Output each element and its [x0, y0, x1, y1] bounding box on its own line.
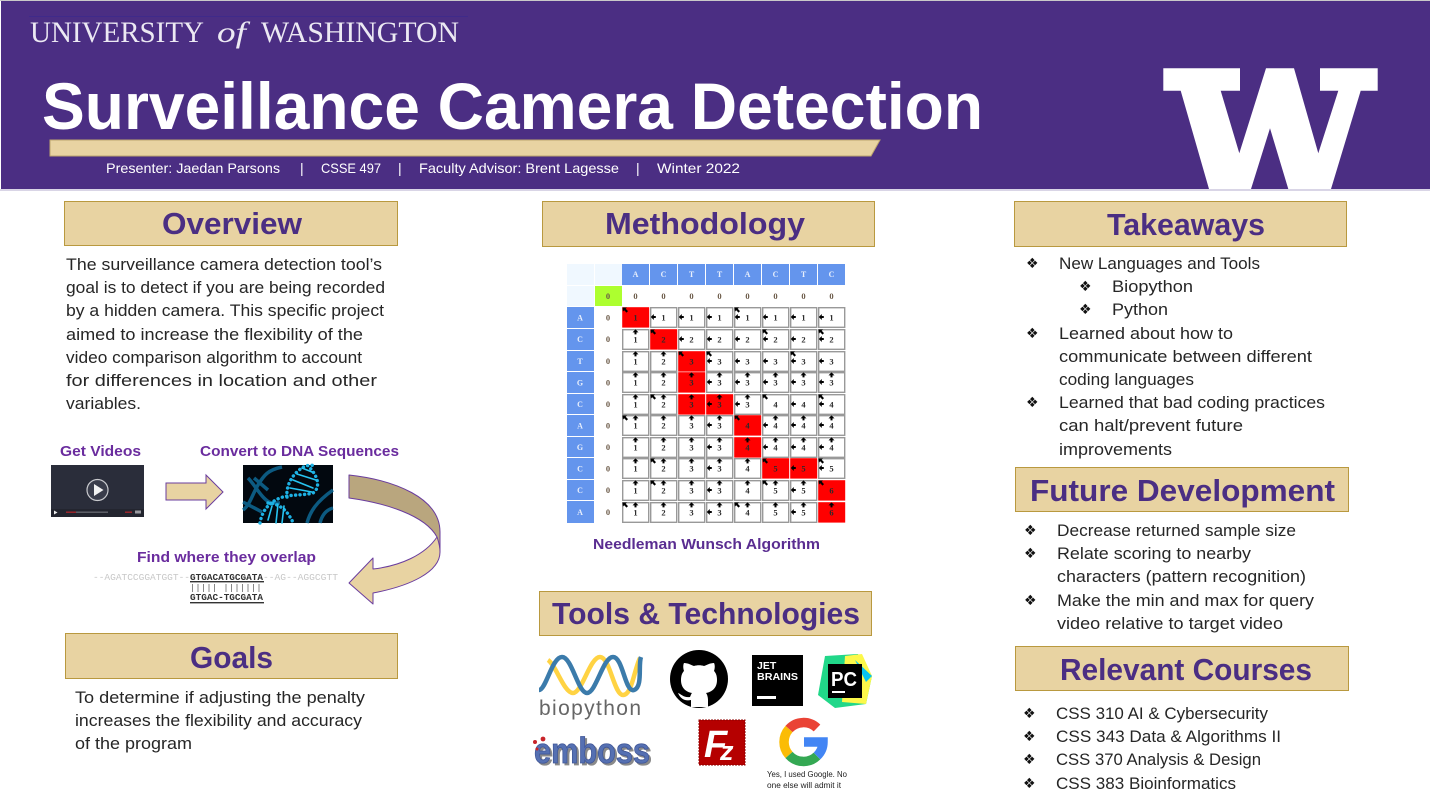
- matrix row 10: 1: [633, 508, 638, 518]
- matrix row 7: 2: [661, 442, 666, 452]
- matrix row 8: 3: [717, 464, 722, 474]
- matrix row 7: 4: [829, 442, 834, 452]
- matrix row 6: 1: [633, 420, 638, 430]
- matrix row 5: 2: [661, 400, 666, 410]
- overview text: The surveillance camera detection tool’s: [66, 255, 382, 274]
- icon: github: [670, 650, 728, 708]
- sequence alignment: GTGACATGCGATA: [190, 573, 264, 583]
- overview text: goal is to detect if you are being recorded: [66, 278, 385, 297]
- matrix row 4: 3: [745, 378, 750, 388]
- matrix header: C: [661, 270, 667, 279]
- matrix zero row and column: 0: [606, 291, 610, 301]
- takeaways heading: [1014, 202, 1346, 246]
- matrix zero row and column: 0: [661, 291, 666, 301]
- matrix row 5: 1: [633, 400, 638, 410]
- matrix row 6: 2: [661, 420, 666, 430]
- takeaways list: Learned about how to: [1059, 324, 1233, 343]
- panel: goals: [66, 634, 398, 753]
- matrix row 1: 1: [661, 312, 666, 322]
- matrix row 1: 1: [717, 312, 722, 322]
- matrix row 4: 3: [689, 378, 694, 388]
- matrix row 7: 4: [801, 442, 806, 452]
- icon: emboss: emboss: [536, 732, 652, 773]
- matrix zero row and column: 0: [606, 334, 610, 344]
- courses list: ❖: [1023, 706, 1036, 722]
- matrix row 7: 4: [745, 442, 750, 452]
- overview heading: Overview: [162, 206, 303, 241]
- matrix zero row and column: 0: [606, 507, 610, 517]
- matrix zero row and column: 0: [606, 442, 610, 452]
- matrix row 2: 2: [801, 334, 806, 344]
- matrix row 4: 1: [633, 378, 638, 388]
- future list: Decrease returned sample size: [1057, 521, 1296, 540]
- matrix row 5: [623, 394, 845, 415]
- process diagram: [51, 444, 440, 604]
- future list: Relate scoring to nearby: [1057, 544, 1252, 563]
- gold title bar: [50, 140, 880, 156]
- matrix row 1: 1: [829, 312, 834, 322]
- panel: future development: [1016, 468, 1348, 633]
- matrix header: [567, 264, 845, 523]
- courses list: ❖: [1023, 729, 1036, 745]
- panel: takeaways: [1014, 202, 1346, 459]
- matrix row 8: 3: [689, 464, 694, 474]
- google caption: [767, 769, 847, 790]
- matrix row 5: 3: [689, 400, 694, 410]
- matrix zero row and column: 0: [745, 291, 750, 301]
- matrix zero row and column: 0: [829, 291, 834, 301]
- panel: methodology: [542, 202, 874, 553]
- university wordmark: of: [217, 16, 251, 49]
- matrix row 6: 3: [689, 420, 694, 430]
- takeaways list: ❖: [1079, 302, 1092, 318]
- methodology heading: Methodology: [605, 206, 806, 241]
- matrix row 8: 4: [745, 464, 750, 474]
- matrix row 2: 2: [829, 334, 834, 344]
- sequence alignment: --AGATCCGGATGGT--: [93, 573, 190, 583]
- matrix row 3: 3: [829, 356, 834, 366]
- goals heading: [66, 634, 398, 678]
- future heading: Future Development: [1030, 473, 1335, 508]
- matrix row 8: 5: [773, 464, 778, 474]
- future list: ❖: [1024, 593, 1037, 609]
- courses list: CSS 310 AI & Cybersecurity: [1056, 704, 1268, 723]
- matrix row 5: 3: [717, 400, 722, 410]
- overview text: for differences in location and other: [66, 371, 377, 390]
- matrix row 9: 3: [689, 486, 694, 496]
- icon: filezilla: F: [704, 724, 729, 766]
- matrix zero row and column: 0: [689, 291, 694, 301]
- matrix row 1: 1: [689, 312, 694, 322]
- matrix header: T: [717, 270, 723, 279]
- takeaways list: communicate between different: [1059, 347, 1312, 366]
- takeaways list: Python: [1112, 300, 1168, 319]
- courses heading: [1016, 646, 1348, 690]
- google caption: one else will admit it: [767, 780, 842, 790]
- presenter line: CSSE 497: [321, 160, 381, 176]
- matrix row 6: 4: [801, 420, 806, 430]
- goals text: [75, 688, 366, 753]
- matrix row 3: 3: [717, 356, 722, 366]
- future list: ❖: [1024, 523, 1037, 539]
- matrix row 8: 1: [633, 464, 638, 474]
- matrix zero row and column: [606, 291, 834, 517]
- matrix header: C: [773, 270, 779, 279]
- icon: jetbrains: [752, 655, 803, 706]
- overview text: [66, 255, 385, 413]
- courses list: ❖: [1023, 752, 1036, 768]
- sequence alignment: --AG--AGGCGTT: [263, 573, 339, 583]
- matrix header: T: [689, 270, 695, 279]
- matrix row 3: 3: [773, 356, 778, 366]
- goals text: increases the flexibility and accuracy: [75, 711, 363, 730]
- takeaways list: ❖: [1026, 326, 1039, 342]
- university wordmark: UNIVERSITY: [30, 16, 204, 49]
- matrix header: C: [577, 400, 583, 409]
- matrix header: C: [577, 486, 583, 495]
- takeaways list: improvements: [1059, 440, 1172, 459]
- takeaways list: Learned that bad coding practices: [1059, 393, 1325, 412]
- future list: video relative to target video: [1057, 614, 1283, 633]
- presenter line: Winter 2022: [657, 160, 740, 176]
- matrix row 9: 4: [745, 486, 750, 496]
- label: find overlap: Find where they overlap: [137, 550, 316, 566]
- courses heading: Relevant Courses: [1060, 652, 1312, 687]
- presenter line: |: [636, 160, 640, 176]
- matrix row 8: 5: [801, 464, 806, 474]
- matrix row 7: [623, 437, 845, 458]
- matrix row 2: 2: [745, 334, 750, 344]
- matrix row 10: 5: [773, 508, 778, 518]
- matrix row 7: 3: [689, 442, 694, 452]
- takeaways list: coding languages: [1059, 370, 1194, 389]
- matrix header: T: [801, 270, 807, 279]
- matrix header: T: [577, 357, 583, 366]
- goals heading: Goals: [190, 640, 273, 675]
- university wordmark: WASHINGTON: [261, 16, 459, 49]
- matrix zero row and column: 0: [606, 464, 610, 474]
- matrix row 1: 1: [633, 312, 638, 322]
- matrix row 9: 6: [829, 486, 834, 496]
- matrix row 10: 4: [745, 508, 750, 518]
- matrix header: G: [577, 378, 583, 388]
- overview text: video comparison algorithm to account: [66, 348, 362, 367]
- icon: biopython: [539, 657, 641, 720]
- matrix row 5: 4: [829, 400, 834, 410]
- matrix header: C: [577, 335, 583, 344]
- matrix row 8: 2: [661, 464, 666, 474]
- matrix row 2: 1: [633, 334, 638, 344]
- matrix header: C: [577, 464, 583, 474]
- overview heading: [64, 202, 398, 246]
- presenter line: |: [300, 160, 304, 176]
- matrix row 9: 5: [801, 486, 806, 496]
- matrix row 4: 3: [717, 378, 722, 388]
- matrix header: A: [745, 270, 751, 279]
- matrix row 6: 4: [829, 420, 834, 430]
- UW W logo: [1163, 68, 1378, 189]
- takeaways list: Biopython: [1112, 277, 1193, 296]
- matrix row 4: 3: [829, 378, 834, 388]
- takeaways list: [1026, 254, 1325, 459]
- matrix row 10: [622, 502, 845, 523]
- panel: overview: [64, 202, 398, 413]
- courses list: ❖: [1023, 776, 1036, 792]
- matrix row 4: 2: [661, 378, 666, 388]
- matrix row 8: 5: [829, 464, 834, 474]
- overview text: aimed to increase the flexibility of the: [66, 325, 363, 344]
- header banner: [0, 0, 1430, 191]
- takeaways list: can halt/prevent future: [1059, 416, 1243, 435]
- icon: jetbrains: BRAINS: [757, 671, 798, 683]
- matrix row 9: 2: [661, 486, 666, 496]
- matrix row 2: 2: [773, 334, 778, 344]
- matrix row 4: [623, 372, 845, 393]
- matrix zero row and column: 0: [606, 399, 610, 409]
- goals text: of the program: [75, 734, 192, 753]
- matrix row 8: [623, 458, 845, 479]
- matrix row 3: 2: [661, 356, 666, 366]
- presenter line: |: [398, 160, 402, 176]
- matrix header: A: [577, 422, 583, 430]
- matrix row 9: 5: [773, 486, 778, 496]
- arrow: videos to dna: [166, 475, 223, 509]
- matrix row 9: [623, 480, 845, 501]
- icon: filezilla: z: [719, 736, 734, 766]
- matrix row 10: 6: [829, 508, 834, 518]
- arrow: curved dna to overlap: [349, 475, 440, 604]
- sequence alignment: [93, 573, 339, 603]
- matrix row 3: 3: [745, 356, 750, 366]
- matrix row 3: 3: [689, 356, 694, 366]
- courses list: CSS 343 Data & Algorithms II: [1056, 727, 1281, 746]
- future list: Make the min and max for query: [1057, 591, 1315, 610]
- courses list: CSS 383 Bioinformatics: [1056, 774, 1236, 793]
- matrix row 6: 4: [773, 420, 778, 430]
- matrix zero row and column: 0: [606, 312, 610, 322]
- matrix row 10: 3: [717, 508, 722, 518]
- matrix row 7: 4: [773, 442, 778, 452]
- matrix row 1: 1: [801, 312, 806, 322]
- methodology heading: [542, 202, 874, 246]
- matrix row 5: 3: [745, 400, 750, 410]
- icon: pycharm: [818, 654, 872, 708]
- matrix row 3: 3: [801, 356, 806, 366]
- matrix row 4: 3: [801, 378, 806, 388]
- university wordmark: [29, 16, 468, 49]
- matrix row 2: 2: [717, 334, 722, 344]
- matrix row 6: [622, 415, 845, 436]
- matrix row 2: 2: [689, 334, 694, 344]
- matrix caption: Needleman Wunsch Algorithm: [593, 536, 820, 553]
- icon: filezilla: [699, 720, 745, 766]
- matrix row 10: 5: [801, 508, 806, 518]
- matrix zero row and column: 0: [633, 291, 638, 301]
- matrix header: A: [577, 314, 583, 322]
- matrix zero row and column: 0: [773, 291, 778, 301]
- label: convert to dna: Convert to DNA Sequences: [200, 444, 399, 460]
- matrix row 1: 1: [745, 312, 750, 322]
- tools heading: Tools & Technologies: [552, 596, 860, 631]
- matrix zero row and column: 0: [606, 356, 610, 366]
- matrix row 2: [623, 329, 845, 350]
- icon: pycharm: PC: [831, 669, 857, 691]
- matrix row 1: [622, 307, 845, 328]
- matrix header: A: [577, 508, 583, 517]
- matrix row 10: 2: [661, 508, 666, 518]
- icon: jetbrains: JET: [757, 660, 777, 672]
- google caption: Yes, I used Google. No: [767, 769, 847, 779]
- panel: tools and technologies: [533, 592, 872, 790]
- matrix header: G: [577, 443, 583, 452]
- courses list: CSS 370 Analysis & Design: [1056, 750, 1261, 769]
- matrix row 9: 3: [717, 486, 722, 496]
- matrix row 3: [623, 351, 845, 372]
- needleman wunsch matrix: [567, 264, 845, 523]
- matrix row 6: 3: [717, 420, 722, 430]
- icon: dna image: [243, 465, 333, 523]
- matrix row 7: 1: [633, 442, 638, 452]
- icon: emboss: emboss: [534, 730, 650, 771]
- matrix zero row and column: 0: [606, 420, 610, 430]
- takeaways list: ❖: [1026, 256, 1039, 272]
- matrix zero row and column: 0: [606, 378, 610, 388]
- icon: biopython: biopython: [539, 697, 641, 720]
- goals text: To determine if adjusting the penalty: [75, 688, 366, 707]
- courses list: [1023, 704, 1281, 793]
- takeaways heading: Takeaways: [1107, 207, 1265, 242]
- presenter line: Faculty Advisor: Brent Lagesse: [419, 160, 619, 176]
- matrix row 5: 4: [773, 400, 778, 410]
- takeaways list: ❖: [1026, 395, 1039, 411]
- matrix zero row and column: 0: [717, 291, 722, 301]
- matrix row 5: 4: [801, 400, 806, 410]
- matrix row 6: 4: [745, 420, 750, 430]
- title: Surveillance Camera Detection: [42, 69, 983, 143]
- matrix zero row and column: 0: [801, 291, 806, 301]
- matrix header: A: [633, 270, 639, 279]
- matrix zero row and column: 0: [606, 485, 610, 495]
- icon: video player: [51, 465, 144, 517]
- takeaways list: New Languages and Tools: [1059, 254, 1260, 273]
- overview text: by a hidden camera. This specific project: [66, 301, 384, 320]
- takeaways list: ❖: [1079, 279, 1092, 295]
- presenter line: Presenter: Jaedan Parsons: [106, 160, 280, 176]
- matrix row 2: 2: [661, 334, 666, 344]
- matrix row 10: 3: [689, 508, 694, 518]
- label: get videos: Get Videos: [60, 444, 141, 460]
- future list: characters (pattern recognition): [1057, 567, 1306, 586]
- presenter line: [106, 160, 740, 176]
- matrix row 4: 3: [773, 378, 778, 388]
- matrix row 1: 1: [773, 312, 778, 322]
- sequence alignment: GTGAC-TGCGATA: [190, 593, 264, 603]
- matrix row 7: 3: [717, 442, 722, 452]
- matrix row 3: 1: [633, 356, 638, 366]
- future list: [1024, 521, 1315, 633]
- matrix header: C: [829, 270, 835, 279]
- future list: ❖: [1024, 546, 1037, 562]
- overview text: variables.: [66, 394, 141, 413]
- matrix row 9: 1: [633, 486, 638, 496]
- panel: relevant courses: [1016, 646, 1348, 793]
- icon: google: [784, 723, 823, 761]
